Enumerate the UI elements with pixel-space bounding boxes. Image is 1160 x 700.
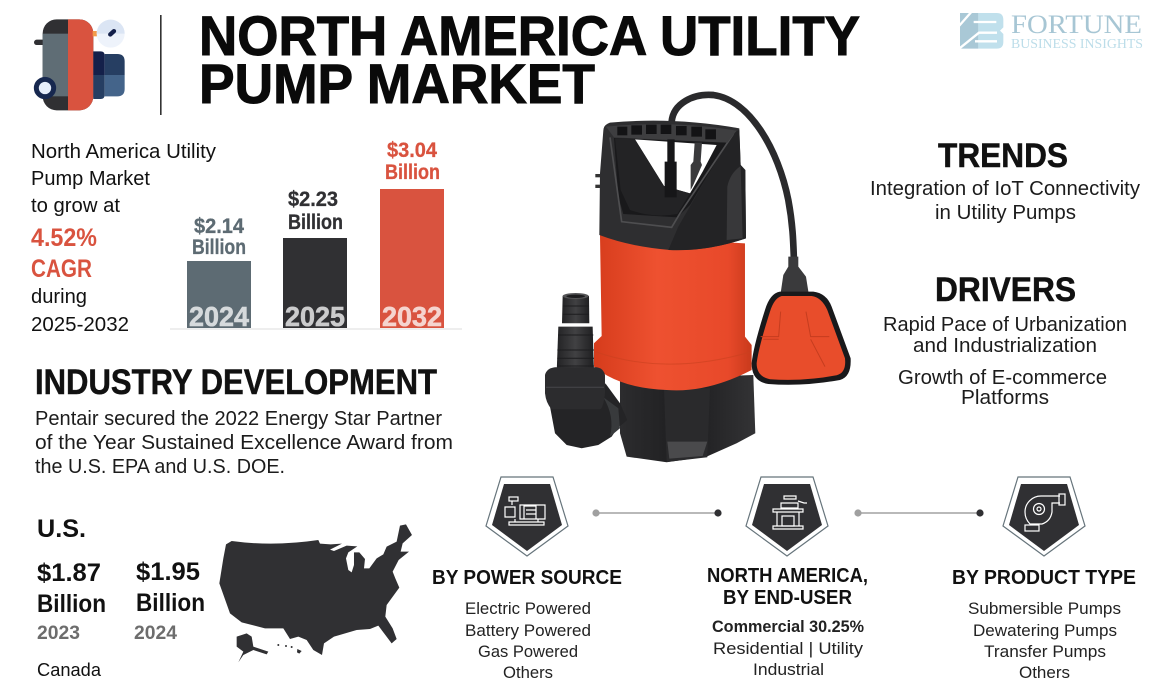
icon: turbo pump pentagon <box>1003 477 1085 556</box>
panel: by end-user: NORTH AMERICA, <box>707 565 868 587</box>
float switch <box>752 257 851 385</box>
panel: regional values: 2024 <box>134 623 177 644</box>
divider <box>160 15 162 115</box>
panel: by end-user: Residential | Utility <box>713 639 864 658</box>
title <box>199 4 860 115</box>
text block: CAGR summary: 4.52% <box>31 224 97 252</box>
bar: 2025 <box>283 188 347 332</box>
bar: 2025: $2.23 <box>288 188 338 211</box>
text block: CAGR summary: during <box>31 286 87 308</box>
bar: 2025: Billion <box>288 211 343 234</box>
title: PUMP MARKET <box>199 52 595 115</box>
panel: industry development: of the Year Sustained Excellence Award from <box>35 432 453 454</box>
icon: grinder pentagon <box>746 477 828 556</box>
connector: end-user to product type <box>854 509 984 517</box>
bar: 2025: 2025 <box>285 301 345 332</box>
map: United States <box>219 524 412 662</box>
pump head <box>595 121 746 250</box>
connector: power source to end-user <box>592 509 722 517</box>
bar: 2024 <box>187 215 251 332</box>
heading: drivers: Platforms <box>961 387 1049 409</box>
photo: submersible pump <box>545 95 851 462</box>
bar: 2024: Billion <box>192 236 246 259</box>
panel: by product type: Others <box>1019 663 1070 682</box>
text block: CAGR summary: Pump Market <box>31 168 150 190</box>
panel: by end-user: Industrial <box>753 660 824 679</box>
pump base <box>620 375 755 462</box>
panel: by product type <box>952 567 1136 682</box>
panel: by product type: Transfer Pumps <box>984 642 1106 661</box>
heading: drivers: DRIVERS <box>935 271 1076 309</box>
text block: CAGR summary: 2025-2032 <box>31 314 129 336</box>
heading: drivers <box>883 271 1127 409</box>
panel: by end-user: BY END-USER <box>723 587 853 609</box>
bar: 2032: Billion <box>385 161 440 184</box>
icon: motor pump pentagon <box>486 477 568 556</box>
heading: trends: in Utility Pumps <box>935 202 1076 224</box>
title: NORTH AMERICA UTILITY <box>199 4 860 67</box>
heading: trends: TRENDS <box>938 137 1068 175</box>
panel: regional values: Canada <box>37 660 102 680</box>
panel: by end-user: Commercial 30.25% <box>712 617 864 636</box>
panel: by product type: BY PRODUCT TYPE <box>952 567 1136 589</box>
panel: industry development <box>35 363 453 478</box>
panel: by end-user <box>707 565 868 679</box>
bar: 2032: $3.04 <box>387 139 437 162</box>
logo: Fortune Business Insights: BUSINESS INSIGHTS <box>1011 37 1143 52</box>
cable <box>672 95 794 262</box>
heading: drivers: and Industrialization <box>913 335 1097 357</box>
panel: by power source: Electric Powered <box>465 599 591 618</box>
bar: 2032 <box>380 139 444 332</box>
text block: CAGR summary: CAGR <box>31 255 92 283</box>
panel: by product type: Submersible Pumps <box>968 599 1121 618</box>
panel: regional values <box>37 515 205 680</box>
text block: CAGR summary: North America Utility <box>31 141 216 163</box>
text block: CAGR summary <box>31 141 216 336</box>
heading: trends: Integration of IoT Connectivity <box>870 178 1140 200</box>
panel: regional values: 2023 <box>37 623 80 644</box>
panel: industry development: Pentair secured the 2022 Energy Star Partner <box>35 408 442 430</box>
heading: trends <box>870 137 1140 224</box>
logo: Fortune Business Insights: FORTUNE <box>1011 10 1142 39</box>
panel: regional values: Billion <box>37 590 106 618</box>
panel: regional values: U.S. <box>37 515 86 543</box>
panel: by power source: Gas Powered <box>478 642 578 661</box>
text block: CAGR summary: to grow at <box>31 195 120 217</box>
heading: drivers: Rapid Pace of Urbanization <box>883 314 1127 336</box>
panel: industry development: INDUSTRY DEVELOPMENT <box>35 363 437 402</box>
bar: 2024: 2024 <box>189 301 249 332</box>
panel: regional values: Billion <box>136 589 205 617</box>
bar: 2024: $2.14 <box>194 215 244 238</box>
fitting <box>545 293 627 448</box>
panel: industry development: the U.S. EPA and U.S. DOE. <box>35 456 285 478</box>
heading: drivers: Growth of E-commerce <box>898 367 1107 389</box>
panel: by product type: Dewatering Pumps <box>973 621 1117 640</box>
logo: Fortune Business Insights <box>958 10 1143 52</box>
panel: regional values: $1.95 <box>136 558 200 586</box>
pump body <box>594 235 752 390</box>
bar chart: market size <box>170 139 462 332</box>
panel: regional values: $1.87 <box>37 559 101 587</box>
bar: 2032: 2032 <box>382 301 442 332</box>
icon: utility pump emblem <box>34 19 125 110</box>
panel: by power source: Battery Powered <box>465 621 591 640</box>
panel: by power source: Others <box>503 663 553 682</box>
panel: by power source <box>432 567 622 682</box>
panel: by power source: BY POWER SOURCE <box>432 567 622 589</box>
